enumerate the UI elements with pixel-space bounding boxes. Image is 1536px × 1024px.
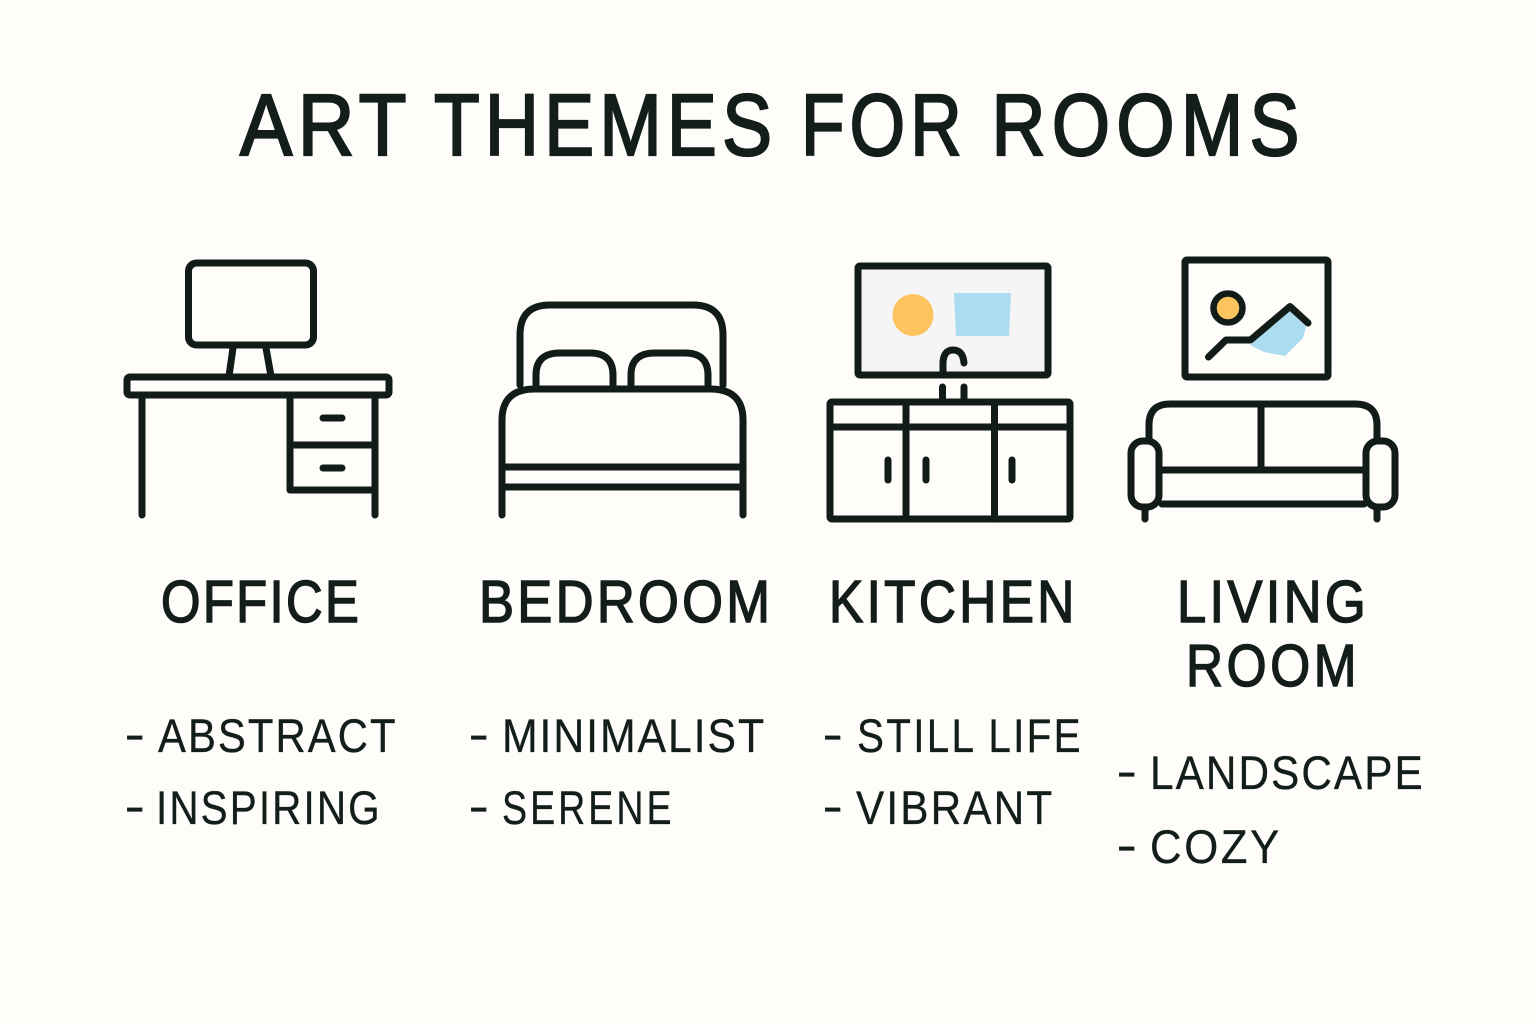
panel: kitchen	[822, 266, 1081, 835]
faucet and cabinets	[830, 350, 1070, 519]
list: living room themes: -	[1116, 745, 1137, 797]
list: bedroom themes: SERENE	[502, 782, 672, 835]
sun	[1214, 294, 1242, 322]
title: ART	[240, 76, 407, 174]
blue square	[954, 293, 1011, 336]
panel: living room	[1116, 260, 1423, 873]
icon: kitchen cabinets with artwork	[830, 266, 1070, 519]
list: office themes	[124, 708, 396, 835]
panel: office	[124, 263, 396, 835]
list: living room themes: LANDSCAPE	[1150, 748, 1423, 800]
title: ROOMS	[992, 78, 1299, 174]
icon: desk with monitor	[127, 263, 389, 515]
orange circle	[892, 294, 934, 336]
icon: bed	[502, 305, 743, 515]
title	[240, 76, 1299, 174]
heading: living room: ROOM	[1186, 633, 1357, 699]
title: FOR	[801, 76, 962, 174]
heading: living room	[1177, 568, 1366, 699]
list: bedroom themes	[468, 708, 764, 835]
list: living room themes: COZY	[1150, 821, 1279, 873]
title: THEMES	[434, 78, 772, 174]
list: living room themes	[1116, 745, 1423, 873]
list: kitchen themes: -	[822, 708, 843, 760]
icon: sofa with framed landscape	[1131, 260, 1395, 519]
list: kitchen themes: STILL LIFE	[857, 710, 1081, 763]
list: kitchen themes	[822, 708, 1081, 835]
list: kitchen themes: -	[822, 780, 843, 832]
heading: bedroom: BEDROOM	[479, 568, 770, 635]
list: bedroom themes: -	[468, 708, 489, 760]
list: office themes: INSPIRING	[156, 782, 380, 835]
list: bedroom themes: -	[468, 780, 489, 832]
panel: bedroom	[468, 305, 770, 835]
list: office themes: -	[124, 708, 145, 760]
list: living room themes: -	[1116, 819, 1137, 871]
heading: kitchen: KITCHEN	[829, 569, 1074, 635]
list: bedroom themes: MINIMALIST	[502, 709, 764, 762]
list: office themes: ABSTRACT	[158, 711, 396, 763]
list: kitchen themes: VIBRANT	[856, 783, 1052, 835]
blue mountain fill	[1250, 310, 1306, 356]
artwork frame	[858, 266, 1048, 375]
frame, mountain line and sofa	[1131, 260, 1395, 519]
list: office themes: -	[124, 780, 145, 832]
heading: office: OFFICE	[161, 568, 359, 635]
heading: living room: LIVING	[1177, 568, 1366, 635]
